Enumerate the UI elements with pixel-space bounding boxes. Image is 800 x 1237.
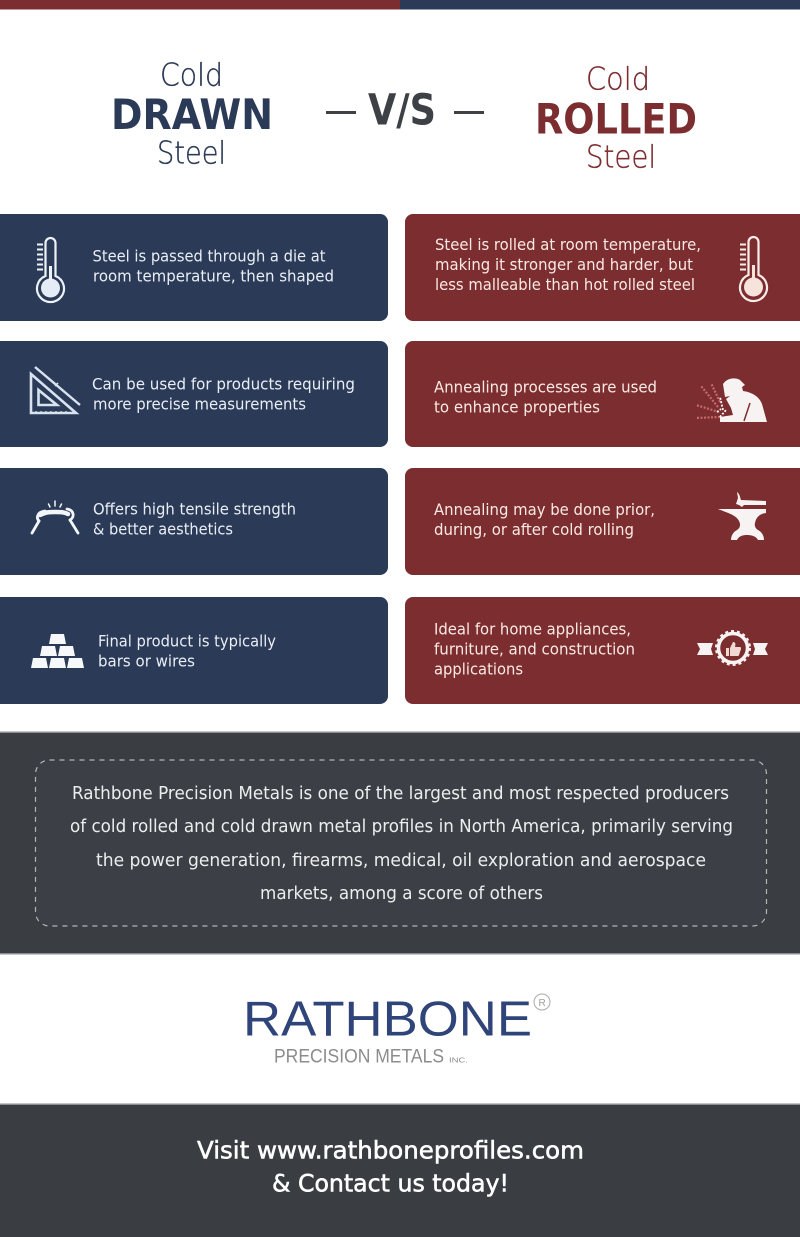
text: Ideal for home appliances,: [434, 620, 631, 638]
logo: Rathbone Precision Metals: INC.: [449, 1056, 468, 1064]
text: room temperature, then shaped: [93, 266, 334, 286]
icon: set square: [31, 367, 80, 413]
dashed frame: [36, 760, 766, 926]
text: during, or after cold rolling: [434, 520, 634, 539]
icon: chain link under tension: [32, 501, 78, 533]
text: Steel is rolled at room temperature,: [435, 235, 701, 254]
text: Steel is passed through a die at: [92, 246, 326, 266]
title: cold rolled steel: Cold: [586, 62, 650, 98]
text: [434, 620, 635, 678]
panel: drawn 1: [0, 214, 388, 321]
panel: rolled 3: [405, 468, 800, 575]
text: Can be used for products requiring: [92, 374, 355, 394]
logo: Rathbone Precision Metals: [243, 992, 550, 1068]
text: less malleable than hot rolled steel: [435, 275, 695, 294]
text: Final product is typically: [98, 632, 276, 650]
text: [434, 378, 657, 416]
text: to enhance properties: [434, 398, 600, 416]
logo: Rathbone Precision Metals: RATHBONE: [243, 992, 532, 1046]
panel: rolled 2: [405, 341, 800, 447]
text: [434, 500, 655, 539]
text: Annealing processes are used: [434, 378, 657, 396]
text: bars or wires: [98, 652, 195, 670]
description text: Rathbone Precision Metals is one of the largest and most respected producers: [72, 783, 729, 804]
panel: rolled 4: [405, 597, 800, 704]
text: [92, 374, 355, 414]
text: furniture, and construction: [434, 640, 635, 658]
text: applications: [434, 660, 523, 678]
top colour bar: [0, 0, 800, 10]
text: Offers high tensile strength: [93, 500, 296, 518]
title: cold drawn steel: [111, 58, 273, 172]
text: making it stronger and harder, but: [435, 255, 693, 274]
title: cold rolled steel: Steel: [586, 140, 656, 176]
panel: rolled 1: [405, 214, 800, 321]
text: Annealing may be done prior,: [434, 500, 655, 519]
icon: thermometer: [740, 237, 767, 301]
versus heading: V/S: [368, 86, 436, 136]
icon: anvil and hammer: [718, 492, 766, 540]
title: cold drawn steel: DRAWN: [111, 90, 273, 139]
panel: drawn 2: [0, 341, 388, 447]
title: cold drawn steel: Steel: [157, 136, 226, 172]
panel: drawn 3: [0, 468, 388, 575]
footer call to action: Visit www.rathboneprofiles.com: [197, 1136, 584, 1164]
text: [98, 632, 276, 670]
icon: thermometer: [37, 238, 64, 302]
text: [93, 500, 296, 538]
footer call to action: & Contact us today!: [272, 1170, 509, 1198]
panel: company description: [0, 732, 800, 954]
panel: drawn 4: [0, 597, 388, 704]
description text: [70, 783, 733, 904]
description text: of cold rolled and cold drawn metal profiles in North America, primarily serving: [70, 816, 733, 837]
title: cold rolled steel: ROLLED: [535, 94, 697, 144]
title: cold rolled steel: [535, 62, 697, 176]
text: more precise measurements: [93, 394, 306, 414]
versus heading: [326, 86, 484, 136]
icon: gold bars: [31, 634, 84, 668]
text: [435, 235, 701, 294]
text: & better aesthetics: [93, 520, 233, 538]
footer call to action: [0, 1104, 800, 1237]
description text: the power generation, firearms, medical, oil exploration and aerospace: [96, 850, 706, 871]
logo: Rathbone Precision Metals: R: [538, 998, 546, 1009]
text: [92, 246, 334, 286]
description text: markets, among a score of others: [260, 883, 543, 904]
logo: Rathbone Precision Metals: PRECISION METALS: [274, 1046, 444, 1068]
icon: welder: [696, 378, 767, 422]
icon: thumbs up badge: [697, 631, 768, 665]
title: cold drawn steel: Cold: [160, 58, 223, 94]
